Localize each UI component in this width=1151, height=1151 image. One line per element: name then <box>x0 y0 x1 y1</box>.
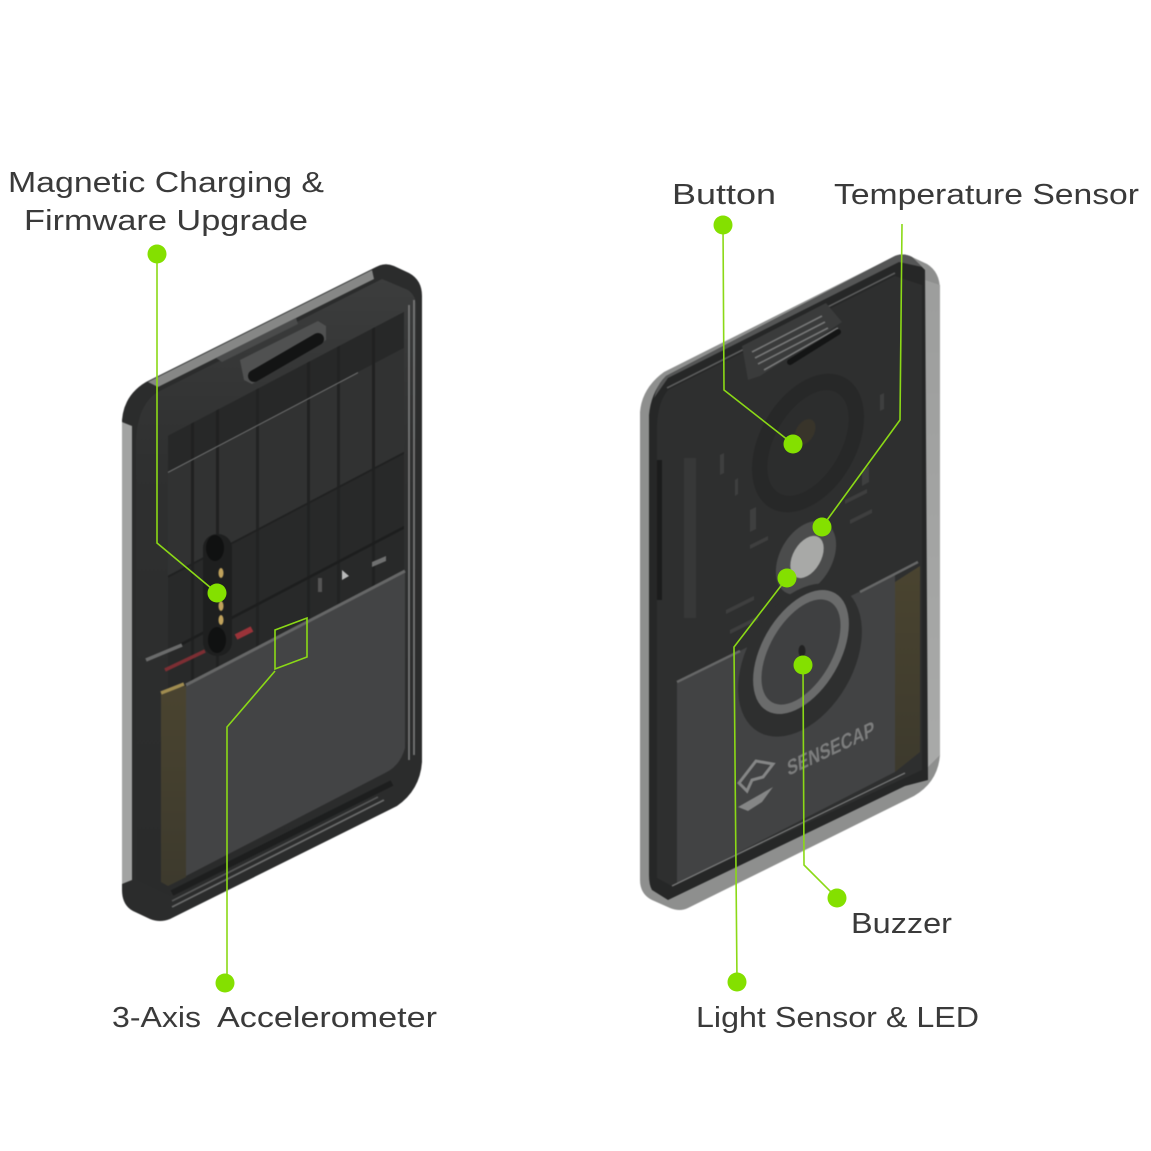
bottom rim <box>172 783 392 907</box>
charging slot <box>216 318 326 384</box>
connector ridge <box>742 303 842 380</box>
label: light sensor: Light Sensor & LED <box>696 1002 979 1034</box>
board traces <box>657 393 884 634</box>
label: magnetic charging: Magnetic Charging & <box>8 167 324 199</box>
button ring <box>729 354 887 532</box>
label: magnetic charging: Firmware Upgrade <box>24 205 308 237</box>
SENSECAP logo <box>738 716 876 811</box>
label: accelerometer: Accelerometer <box>217 1002 437 1034</box>
pogo pin connector <box>203 534 232 656</box>
label: button: Button <box>672 179 776 211</box>
buzzer <box>713 562 887 758</box>
small board components <box>318 556 386 592</box>
light sensor window <box>763 510 849 606</box>
label: accelerometer <box>112 1002 437 1034</box>
device: back view (left) <box>122 264 422 921</box>
SENSECAP logo: SENSECAP <box>786 716 876 781</box>
label: magnetic charging <box>8 167 324 237</box>
battery <box>146 571 405 886</box>
label: buzzer: Buzzer <box>851 908 952 940</box>
label: temperature sensor: Temperature Sensor <box>834 179 1139 211</box>
battery <box>672 562 920 886</box>
device: front view (right) <box>640 254 940 910</box>
marker dots <box>148 216 846 992</box>
label: accelerometer: 3-Axis <box>112 1002 201 1034</box>
circuit board grid <box>168 312 404 696</box>
leader lines <box>157 224 902 983</box>
